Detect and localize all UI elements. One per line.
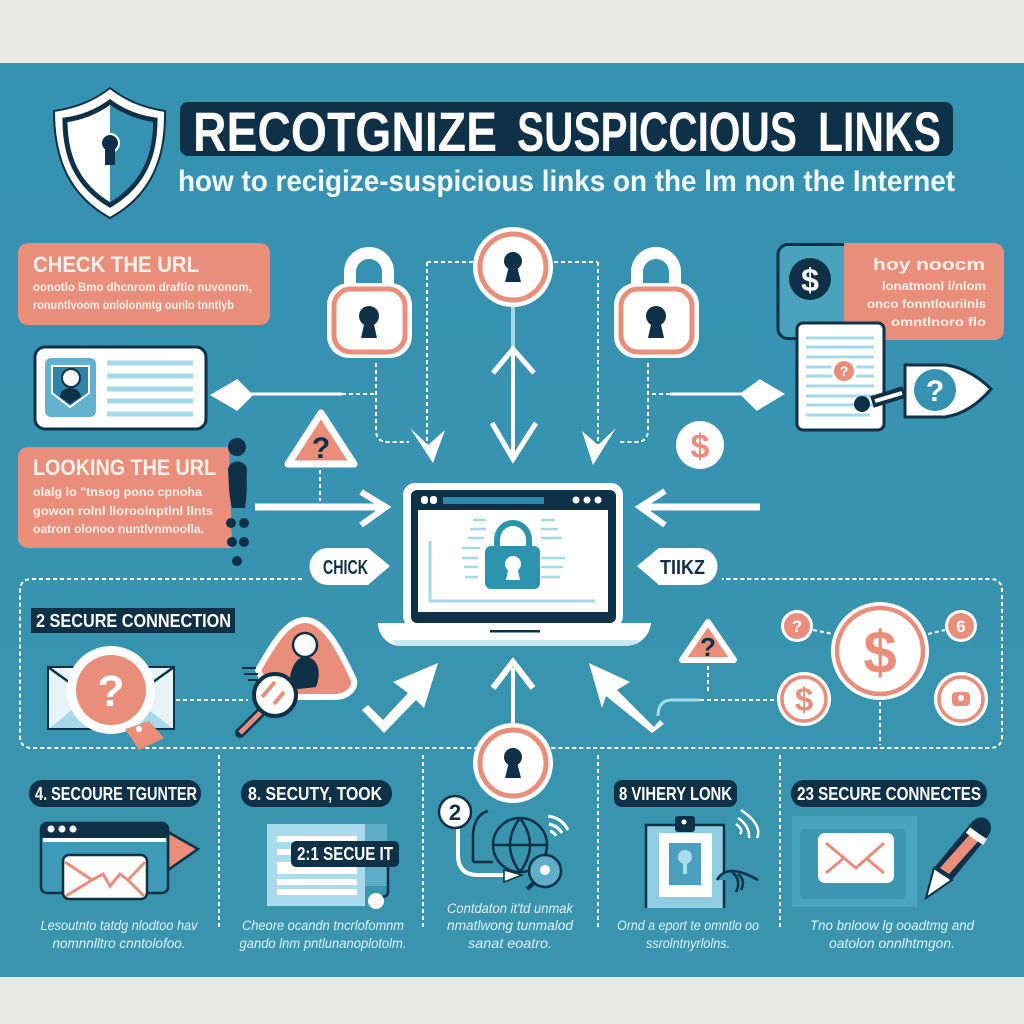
icon: person warning with magnifier bbox=[240, 620, 354, 733]
icon: network of dollar coins: ? bbox=[792, 617, 802, 636]
icon: dark exclamation and dots bbox=[226, 438, 249, 566]
column 2: security took: 2:1 SECUE IT bbox=[297, 844, 393, 864]
icon: warning triangle left bbox=[288, 413, 354, 501]
column 5: secure connection: oatolon onnlhtmgon. bbox=[829, 936, 955, 951]
icon: warning triangle left: ? bbox=[312, 432, 330, 465]
panel: check the url: CHECK THE URL bbox=[33, 252, 199, 277]
icon: magnifier tag with question bbox=[854, 365, 991, 417]
arrow: right dashed down chevron bbox=[554, 262, 616, 465]
panel: top right card: $ bbox=[801, 262, 819, 298]
column 5: secure connection: Tno bnloow lg ooadtmg and bbox=[810, 918, 974, 933]
connector: left diamond and dashed route bbox=[213, 363, 409, 442]
icon: right padlock bbox=[614, 253, 699, 358]
column 4: verify link: Ornd a eport te omntlo oo bbox=[617, 918, 759, 933]
laptop bbox=[378, 483, 651, 646]
icon: magnifier tag with question: ? bbox=[926, 375, 944, 408]
dashed frame bbox=[20, 579, 1002, 748]
column 2: security took: Cheore ocandn tncrlofomnm bbox=[242, 918, 404, 933]
connector: right diamond and dashed route bbox=[618, 363, 782, 442]
column 3: globe and magnifier: nmatlwong tunmalod bbox=[447, 918, 573, 933]
column 2: security took bbox=[240, 780, 406, 951]
icon: envelope with question bbox=[48, 646, 248, 750]
column 1: secure tgunter: Lesoutnto tatdg nlodtoo hav bbox=[40, 918, 199, 933]
column dividers bbox=[219, 755, 780, 930]
panel: left id card bbox=[35, 347, 206, 429]
icon: warning triangle right: ? bbox=[700, 632, 716, 662]
icon: left padlock bbox=[327, 253, 412, 358]
label: check tag bbox=[310, 548, 390, 585]
panel: looking the url: olalg lo "tnsog pono cpnoha bbox=[33, 485, 202, 499]
title: SUSPICCIOUS bbox=[517, 100, 797, 163]
column 3: globe and magnifier: sanat eoatro. bbox=[468, 936, 552, 951]
icon: document with question: ? bbox=[840, 363, 848, 379]
panel: looking the url: oatron olonoo nuntlvnmoolla. bbox=[33, 522, 204, 536]
arrow: left arrow into laptop bbox=[255, 492, 386, 525]
icon: document with question bbox=[797, 323, 884, 430]
column 4: verify link bbox=[614, 780, 759, 951]
panel: looking the url bbox=[18, 447, 232, 548]
panel: looking the url: gowon rolnl lloroolnptlnl llnts bbox=[33, 504, 213, 518]
column 1: secure tgunter bbox=[29, 780, 201, 951]
icon: bottom keyhole circle bbox=[473, 723, 553, 803]
column 1: secure tgunter: 4. SECOURE TGUNTER bbox=[35, 784, 197, 804]
icon: network of dollar coins: $ bbox=[863, 619, 897, 686]
panel: top right card bbox=[778, 243, 1004, 340]
panel: check the url: oonotlo Bmo dhcnrom draftlo nuvonom, bbox=[33, 280, 252, 294]
label: secure connection: 2 SECURE CONNECTION bbox=[36, 611, 231, 631]
icon: top keyhole circle bbox=[473, 227, 553, 307]
column 3: globe and magnifier: 2 bbox=[449, 800, 461, 825]
column 2: security took: gando lnm pntlunanoplotolm. bbox=[240, 936, 406, 951]
icon: warning triangle right bbox=[682, 622, 734, 692]
column 4: verify link: ssrolntnyrlolns. bbox=[646, 936, 730, 951]
column 5: secure connection bbox=[791, 780, 991, 951]
column 3: globe and magnifier bbox=[439, 796, 574, 951]
label: time tag: TIIKZ bbox=[660, 557, 705, 579]
icon: shield with keyhole bbox=[54, 88, 165, 218]
column 5: secure connection: 23 SECURE CONNECTES bbox=[797, 784, 981, 804]
panel: top right card: omntlnoro flo bbox=[891, 315, 986, 329]
title: RECOTGNIZE bbox=[193, 100, 497, 163]
title bbox=[180, 100, 953, 163]
column 4: verify link: 8 VIHERY LONK bbox=[619, 784, 732, 804]
arrow: diagonal arrow from lower right bbox=[589, 663, 776, 733]
arrow: diagonal arrow from lower left bbox=[362, 663, 438, 733]
icon: network of dollar coins: $ bbox=[795, 681, 813, 718]
icon: envelope with question: ? bbox=[98, 667, 124, 716]
panel: check the url bbox=[18, 243, 270, 325]
arrow: center double arrow bbox=[492, 307, 536, 460]
panel: looking the url: LOOKING THE URL bbox=[33, 455, 216, 480]
title: LINKS bbox=[818, 100, 941, 163]
panel: top right card: onco fonntlourilnls bbox=[867, 297, 986, 311]
column 2: security took: 8. SECUTY, TOOK bbox=[248, 784, 382, 804]
label: check tag: CHICK bbox=[323, 557, 368, 579]
icon: dollar coin: $ bbox=[691, 428, 710, 466]
subtitle: how to recigize-suspicious links on the lm non the Internet bbox=[178, 165, 955, 198]
icon: dollar coin bbox=[676, 421, 724, 469]
panel: top right card: hoy noocm bbox=[873, 255, 985, 274]
column 3: globe and magnifier: Contdaton it'td unmak bbox=[447, 901, 574, 916]
panel: top right card: lonatmonl l/nlom bbox=[882, 279, 986, 293]
arrow: bottom center up arrow bbox=[493, 662, 533, 726]
arrow: right arrow into laptop bbox=[640, 491, 760, 525]
label: time tag bbox=[637, 548, 718, 585]
arrow: left dashed down chevron bbox=[410, 262, 473, 463]
panel: check the url: ronuntlvoom onlolonmtg ounlo tnntlyb bbox=[33, 298, 234, 312]
column 1: secure tgunter: nomnnlltro cnntolofoo. bbox=[52, 936, 186, 951]
icon: network of dollar coins bbox=[777, 602, 988, 745]
icon: network of dollar coins: 6 bbox=[956, 617, 966, 636]
